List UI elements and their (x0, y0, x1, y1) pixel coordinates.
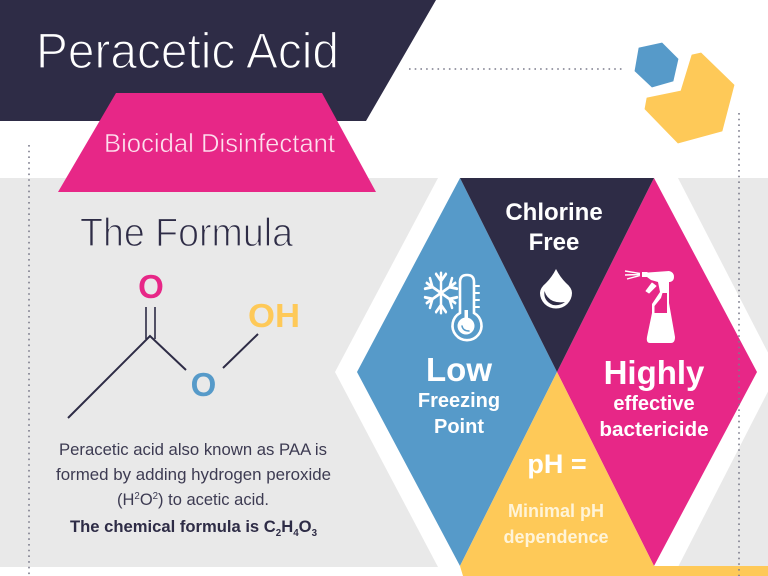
molecule diagram (68, 268, 300, 418)
molecule diagram: OH (248, 297, 300, 334)
label: highly: Highly (604, 354, 705, 391)
formula description: Peracetic acid also known as PAA is (59, 440, 327, 459)
label: effective bactericide: effective (613, 393, 695, 415)
formula description: 2 (134, 491, 140, 502)
formula description: 2 (276, 528, 282, 539)
formula description: 3 (312, 528, 317, 539)
formula description: H (281, 517, 293, 536)
formula description: O (140, 490, 153, 509)
panel: low freezing point (357, 178, 557, 566)
header banner (0, 0, 436, 121)
label: minimal ph dependence: Minimal pH (508, 501, 604, 521)
label: chlorine free (505, 199, 603, 256)
label: minimal ph dependence: dependence (503, 527, 609, 547)
label: effective bactericide: bactericide (599, 418, 709, 441)
formula description: 4 (293, 528, 299, 539)
label: low: Low (426, 351, 492, 388)
formula heading: The Formula (80, 211, 294, 255)
label: freezing point (418, 390, 500, 438)
panel: chlorine free (460, 178, 654, 372)
icon: water drop (540, 269, 572, 308)
label: effective bactericide (599, 393, 709, 441)
subtitle banner (58, 93, 376, 192)
label: chlorine free: Chlorine (505, 199, 603, 226)
formula description: ) to acetic acid. (158, 490, 269, 509)
label: minimal ph dependence (503, 501, 609, 547)
panel: the formula (56, 211, 331, 539)
label: freezing point: Freezing (418, 390, 500, 412)
formula description (56, 440, 331, 539)
formula description: formed by adding hydrogen peroxide (56, 465, 331, 484)
title: Peracetic Acid (36, 23, 339, 79)
panel: highly effective bactericide (557, 178, 757, 566)
molecule diagram: O (191, 366, 216, 403)
label: chlorine free: Free (529, 229, 579, 256)
formula description: 2 (153, 491, 158, 502)
panel: ph (460, 372, 654, 566)
formula description: (H (117, 490, 135, 509)
formula description: O (299, 517, 312, 536)
label: ph equals: pH = (527, 449, 587, 479)
formula description: The chemical formula is C (70, 517, 281, 536)
decorative hexagons (635, 43, 734, 143)
subtitle: Biocidal Disinfectant (104, 128, 336, 158)
molecule diagram: O (138, 268, 164, 305)
label: freezing point: Point (434, 416, 484, 438)
icon: spray bottle (625, 271, 675, 343)
icon: snowflake and thermometer (424, 273, 482, 340)
